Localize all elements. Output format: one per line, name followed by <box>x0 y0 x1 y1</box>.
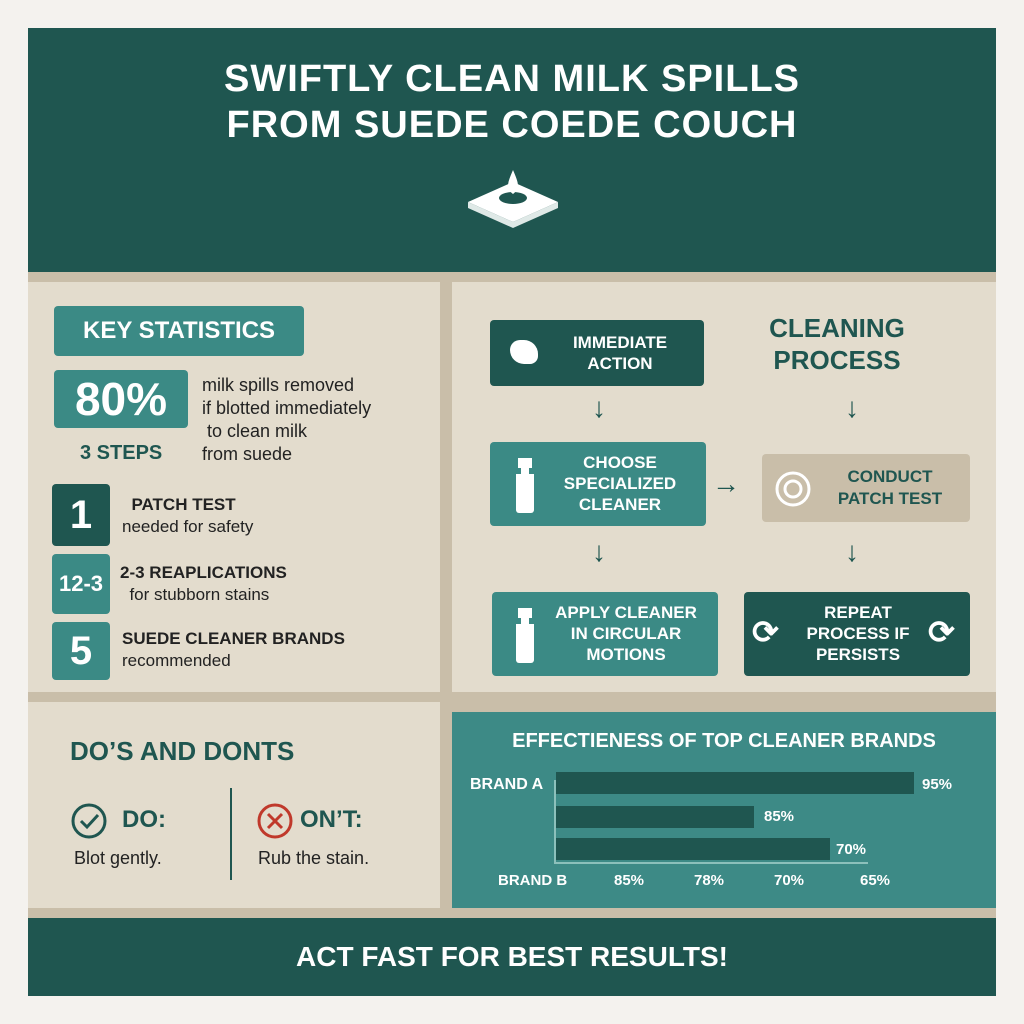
don't <box>258 804 369 868</box>
stat 1: 1 <box>70 492 92 536</box>
step: patch test: PATCH TEST <box>838 489 942 508</box>
bar chart: BRAND A <box>470 776 543 793</box>
panel: cleaning process <box>452 282 996 692</box>
step: patch test: CONDUCT <box>848 467 932 486</box>
divider <box>230 788 232 880</box>
step: choose cleaner: CHOOSE <box>583 453 657 472</box>
title <box>224 58 800 146</box>
do <box>72 804 166 868</box>
text cleaner brands: recommended <box>122 651 231 670</box>
stat 5 <box>52 622 110 680</box>
stat description: milk spills removed <box>202 375 354 395</box>
step: repeat <box>744 592 970 676</box>
step: apply cleaner: IN CIRCULAR <box>571 624 681 643</box>
chart title: EFFECTIENESS OF TOP CLEANER BRANDS <box>512 730 936 752</box>
panel: key statistics <box>28 282 440 692</box>
panel: do's and don'ts <box>28 702 440 908</box>
heading: cleaning process: PROCESS <box>773 345 901 375</box>
step: apply cleaner: APPLY CLEANER <box>555 603 697 622</box>
step: repeat: PERSISTS <box>816 645 900 664</box>
don't: ON’T: <box>300 806 363 833</box>
stat 12-3: 12-3 <box>59 571 103 596</box>
don't: Rub the stain. <box>258 848 369 868</box>
step: apply cleaner: MOTIONS <box>586 645 666 664</box>
arrow: ↓ <box>845 392 859 423</box>
heading: DO’S AND DONTS <box>70 736 294 766</box>
arrow right: → <box>712 468 740 499</box>
icon: cross <box>258 804 292 838</box>
bar chart: 85% <box>764 808 794 825</box>
title: FROM SUEDE COEDE COUCH <box>227 104 797 146</box>
icon: check <box>72 804 106 838</box>
stat description: if blotted immediately <box>202 398 371 418</box>
step: patch test <box>762 454 970 522</box>
bar chart: 78% <box>694 872 724 889</box>
arrow: ↓ <box>592 392 606 423</box>
footer banner: ACT FAST FOR BEST RESULTS! <box>296 941 728 972</box>
stat 80%: 80% <box>75 373 167 425</box>
bar chart <box>470 772 952 889</box>
do: DO: <box>122 806 166 833</box>
stat description <box>202 375 372 464</box>
footer banner <box>28 918 996 996</box>
text reapplications: for stubborn stains <box>129 585 269 604</box>
bar chart: 70% <box>774 872 804 889</box>
panel: bar chart <box>452 712 996 908</box>
bar chart: BRAND B <box>498 872 567 889</box>
icon: cycle: ⟳ <box>752 614 779 650</box>
icon: cycle: ⟳ <box>928 614 955 650</box>
text patch test <box>122 495 254 536</box>
icon: sponge <box>510 340 538 364</box>
bar chart: 85% <box>614 872 644 889</box>
step: repeat: REPEAT <box>824 603 892 622</box>
heading: cleaning process <box>769 313 905 375</box>
icon: spray bottle <box>516 608 534 663</box>
text 3 steps: 3 STEPS <box>80 442 162 464</box>
stat 1 <box>52 484 110 546</box>
arrow: ↓ <box>592 536 606 567</box>
step: repeat: PROCESS IF <box>807 624 909 643</box>
title: SWIFTLY CLEAN MILK SPILLS <box>224 58 800 100</box>
bar chart: 70% <box>836 841 866 858</box>
heading: key statistics <box>54 306 304 356</box>
icon: target <box>776 472 810 506</box>
text reapplications: 2-3 REAPLICATIONS <box>120 563 287 582</box>
bar chart: 65% <box>860 872 890 889</box>
arrow: ↓ <box>845 536 859 567</box>
heading: key statistics: KEY STATISTICS <box>83 317 275 344</box>
stat 80% <box>54 370 188 428</box>
text reapplications <box>120 563 287 604</box>
stat 12-3 <box>52 554 110 614</box>
stat description: to clean milk <box>207 421 307 441</box>
icon: cushion with drop <box>468 170 558 228</box>
step: apply cleaner <box>492 592 718 676</box>
text patch test: needed for safety <box>122 517 253 536</box>
icon: spray bottle <box>516 458 534 513</box>
step: immediate action <box>490 320 704 386</box>
text cleaner brands <box>122 629 345 670</box>
header <box>28 28 996 272</box>
step: choose cleaner <box>490 442 706 526</box>
step: immediate action: ACTION <box>587 354 653 373</box>
text patch test: PATCH TEST <box>131 495 236 514</box>
text cleaner brands: SUEDE CLEANER BRANDS <box>122 629 345 648</box>
stat description: from suede <box>202 444 292 464</box>
stat 5: 5 <box>70 628 92 672</box>
bar chart: 95% <box>922 776 952 793</box>
heading: cleaning process: CLEANING <box>769 313 905 343</box>
step: choose cleaner: SPECIALIZED <box>564 474 676 493</box>
do: Blot gently. <box>74 848 162 868</box>
step: immediate action: IMMEDIATE <box>573 333 667 352</box>
step: choose cleaner: CLEANER <box>579 495 661 514</box>
